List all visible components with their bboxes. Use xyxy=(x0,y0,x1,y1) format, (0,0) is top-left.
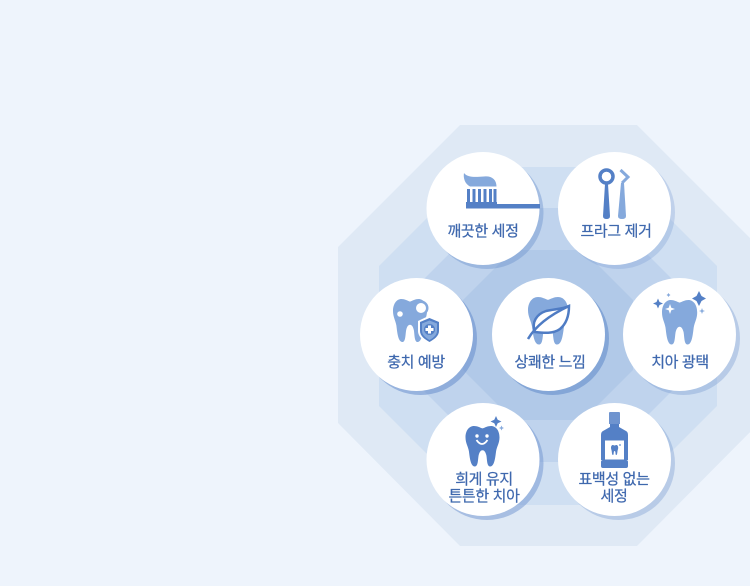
label: 표백성 없는 xyxy=(578,471,650,488)
icon: tooth with leaf xyxy=(528,297,569,344)
label: 프라그 제거 xyxy=(580,223,652,240)
label xyxy=(448,471,520,505)
label: 충치 예방 xyxy=(387,354,445,371)
label: 치아 광택 xyxy=(651,354,709,371)
icon: tooth with shield xyxy=(393,299,441,344)
label: 튼튼한 치아 xyxy=(448,488,520,505)
label: 깨끗한 세정 xyxy=(447,223,519,240)
label xyxy=(578,471,650,505)
item: tooth polish xyxy=(623,278,740,395)
item: non-bleaching wash xyxy=(558,403,675,520)
label: 상쾌한 느낌 xyxy=(514,354,586,371)
icon: dental tools xyxy=(600,170,628,219)
item: fresh feeling xyxy=(492,278,609,395)
item: cavity prevention xyxy=(360,278,477,395)
icon: mouthwash bottle xyxy=(601,412,628,468)
icon: sparkling tooth xyxy=(653,291,706,344)
icon: smiling tooth xyxy=(466,416,504,466)
octagon backdrop xyxy=(338,125,750,546)
item: keep white and strong xyxy=(426,403,544,520)
label: 희게 유지 xyxy=(455,471,513,488)
item: plaque removal xyxy=(558,152,675,269)
item: clean wash xyxy=(426,152,544,269)
label: 세정 xyxy=(601,488,627,505)
icon: toothbrush xyxy=(464,173,540,208)
